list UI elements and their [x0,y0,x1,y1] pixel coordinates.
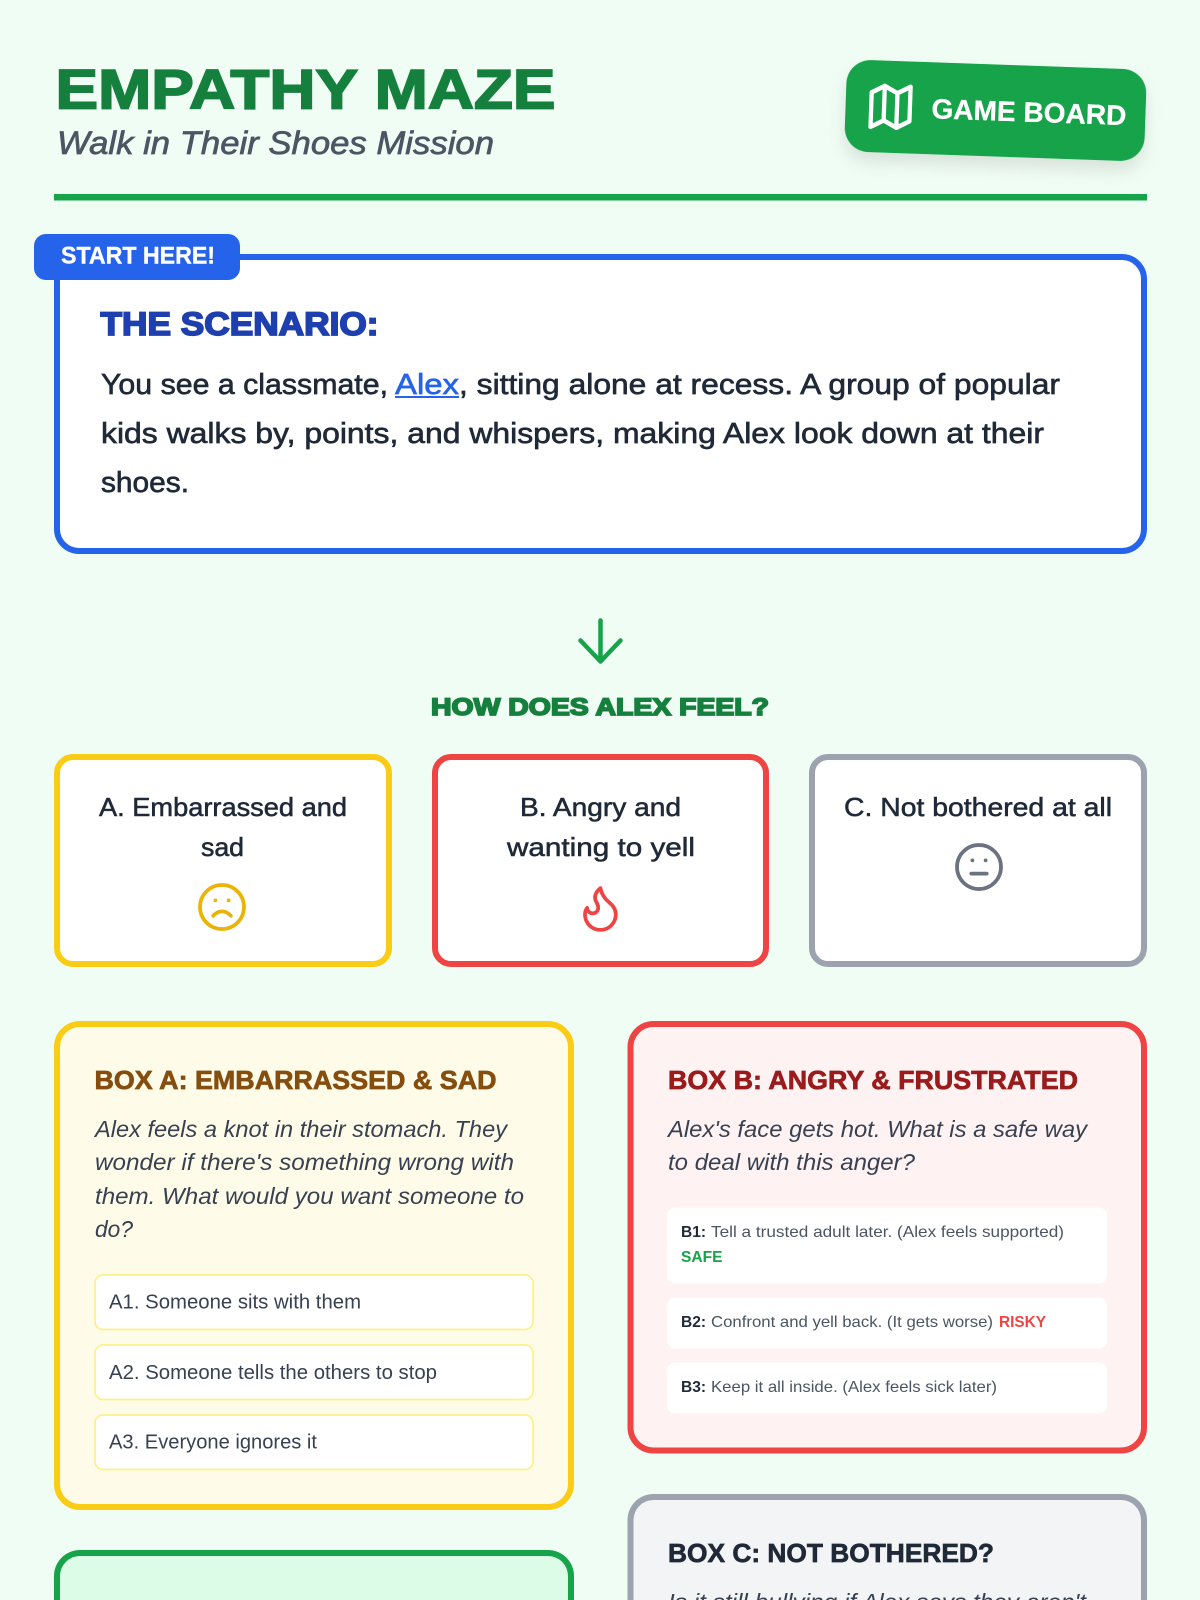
box B heading: BOX B: ANGRY & FRUSTRATED [668,1065,1078,1095]
scenario text: kids walks by, points, and whispers, making Alex look down at their [101,418,1044,450]
card: option B [435,757,766,964]
panel: box A [57,1024,571,1507]
option B1: Tell a trusted adult later. (Alex feels supported) [711,1224,1064,1241]
option B2 [667,1298,1107,1348]
option A3: A3. Everyone ignores it [109,1432,317,1454]
option B1: SAFE [681,1249,723,1266]
title: EMPATHY MAZE [56,58,556,120]
scenario text: , sitting alone at recess. A group of popular [459,369,1060,401]
option B3: B3: [681,1379,706,1396]
option A1 [95,1275,533,1330]
option B2: Confront and yell back. (It gets worse) [711,1314,993,1331]
icon: flame [585,888,616,930]
box B prompt: to deal with this anger? [668,1149,915,1175]
scenario heading: THE SCENARIO: [100,306,378,342]
card: option A: sad [201,832,244,862]
subtitle: Walk in Their Shoes Mission [57,125,494,161]
option A2 [95,1345,533,1400]
box A prompt: wonder if there's something wrong with [95,1149,514,1175]
icon: sad face [200,885,244,929]
icon: map [871,85,911,128]
badge label: GAME BOARD [931,93,1127,131]
panel: box D [54,1550,574,1600]
card: option B: B. Angry and [520,792,681,822]
scenario text [101,369,1060,499]
option B2: RISKY [999,1314,1046,1331]
card: option A: A. Embarrassed and [99,792,347,822]
start here tag: START HERE! [61,242,215,270]
card: option C [812,757,1144,964]
option B1 [667,1208,1107,1284]
card: option B: wanting to yell [506,832,695,862]
box A heading: BOX A: EMBARRASSED & SAD [94,1065,496,1095]
option B3: Keep it all inside. (Alex feels sick later) [711,1379,997,1396]
header rule [54,194,1147,200]
box C heading: BOX C: NOT BOTHERED? [668,1538,994,1568]
question heading: HOW DOES ALEX FEEL? [431,694,769,721]
option B1: B1: [681,1224,706,1241]
box A prompt: them. What would you want someone to [95,1183,524,1209]
option A1: A1. Someone sits with them [109,1292,361,1314]
option A2: A2. Someone tells the others to stop [109,1362,437,1384]
box A prompt: do? [95,1216,133,1242]
badge: game board [844,59,1147,162]
box A prompt [93,1116,524,1242]
option B3 [667,1362,1107,1414]
panel: scenario [34,234,1144,551]
option A3 [95,1415,533,1470]
option B2: B2: [681,1314,706,1331]
scenario text: Alex [395,369,460,401]
card: option A [57,757,389,964]
arrow: down [580,620,620,662]
card: option C: C. Not bothered at all [844,792,1112,822]
panel: box C [628,1494,1147,1600]
panel: box B [630,1024,1144,1450]
box B prompt: Alex's face gets hot. What is a safe way [666,1116,1088,1142]
scenario text: shoes. [101,467,189,499]
box B prompt [666,1116,1088,1175]
scenario text: You see a classmate, [101,369,388,401]
start here tag [34,234,240,280]
icon: neutral face [957,845,1001,889]
box A prompt: Alex feels a knot in their stomach. They [93,1116,508,1142]
box D fill [60,1556,568,1600]
